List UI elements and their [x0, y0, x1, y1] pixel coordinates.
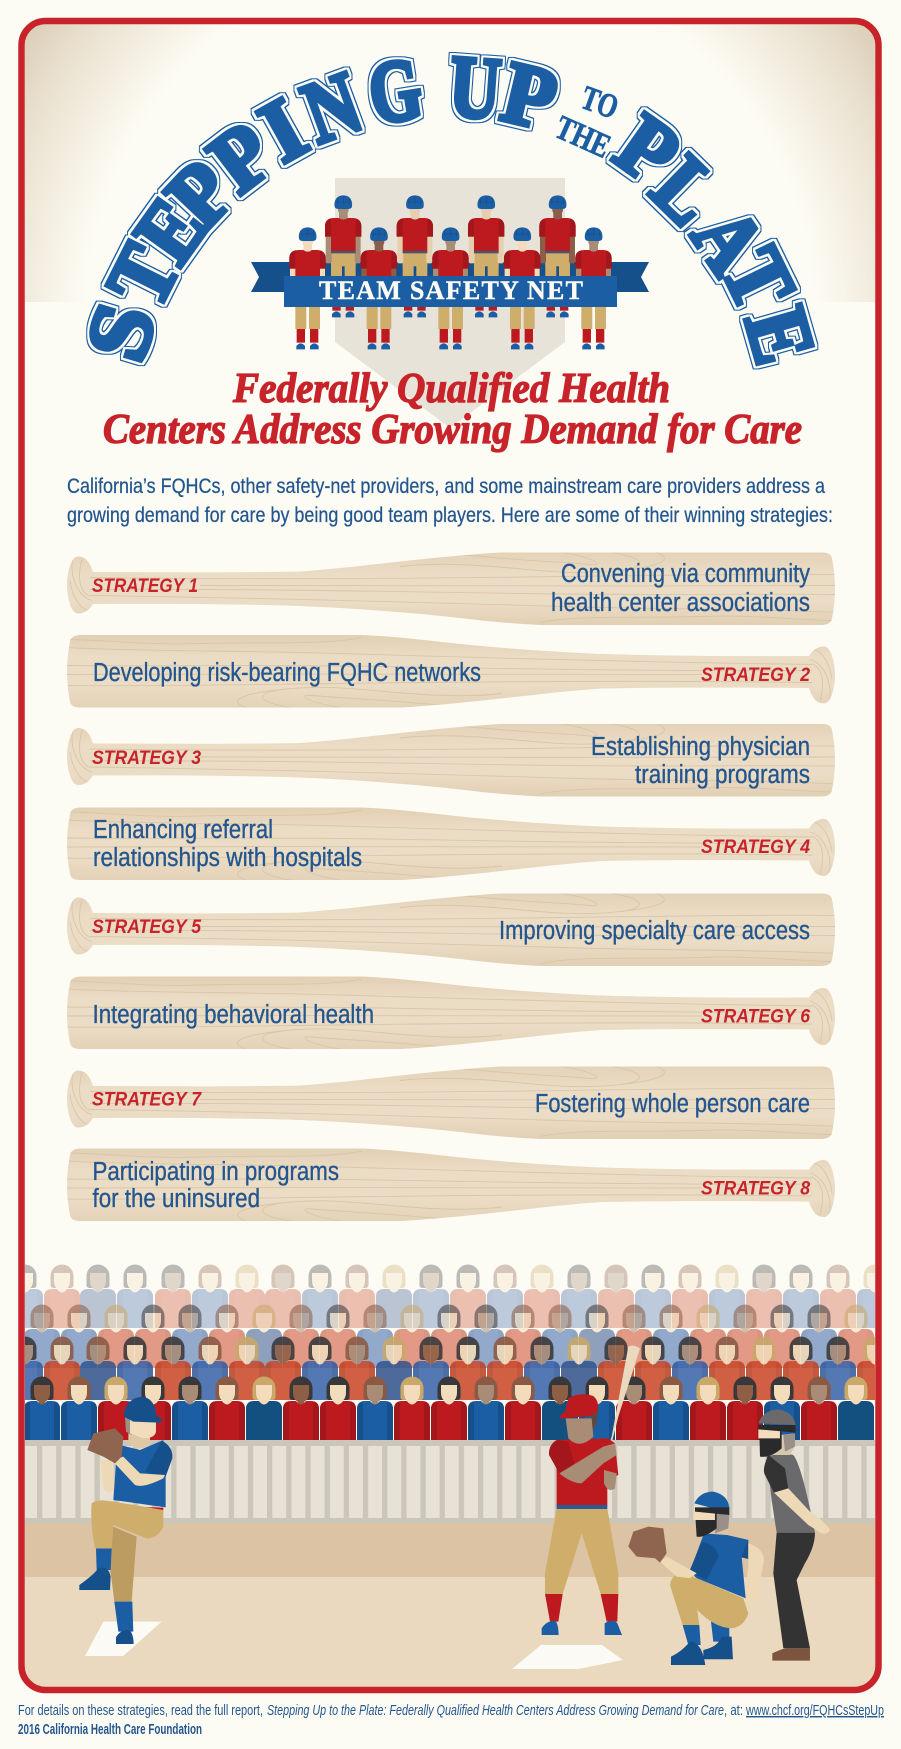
panel: strategy 4 bat: Enhancing referral: [93, 816, 273, 844]
panel: strategy 1 bat: [67, 550, 836, 625]
panel: strategy 6 bat: STRATEGY 6: [701, 1006, 810, 1028]
panel: strategy 3 bat: Establishing physician: [591, 733, 810, 761]
crowd row 4: [7, 1264, 893, 1328]
title arc letters: E: [726, 297, 834, 374]
front row players: [289, 227, 612, 349]
panel: strategy 5 bat: STRATEGY 5: [92, 917, 201, 938]
panel: strategy 8 bat: [66, 1148, 835, 1223]
panel: strategy 3 bat: STRATEGY 3: [92, 748, 201, 769]
crowd row 2: [7, 1336, 893, 1400]
panel: strategy 3 bat: training programs: [635, 761, 810, 789]
panel: strategy 2 bat: Developing risk-bearing FQHC networks: [93, 659, 481, 687]
crowd row 3: [24, 1304, 874, 1368]
panel: strategy 8 bat: Participating in programs: [92, 1158, 339, 1186]
panel: strategy 2 bat: STRATEGY 2: [701, 665, 810, 686]
panel: strategy 4 bat: relationships with hospitals: [93, 844, 362, 872]
intro paragraph: [67, 475, 833, 527]
panel: strategy 4 bat: [66, 808, 835, 882]
title small words: to the: TO: [576, 78, 624, 127]
crowd front row: [24, 1376, 874, 1440]
catcher: [628, 1492, 764, 1665]
title small words: to the: THE: [550, 108, 616, 166]
footer source line: For details on these strategies, read the full report,: [18, 1703, 263, 1719]
panel: strategy 3 bat: [67, 722, 836, 796]
title: Stepping Up to the Plate: [66, 38, 834, 374]
infield dirt: [25, 1523, 875, 1693]
title arc letters: T: [702, 234, 813, 324]
panel: strategy 1 bat: STRATEGY 1: [92, 576, 198, 597]
umpire: [758, 1409, 830, 1661]
outfield fence: [25, 1440, 875, 1523]
panel: strategy 5 bat: [67, 892, 836, 966]
home plate backdrop: [335, 178, 565, 428]
banner tails: [251, 262, 649, 292]
title arc letters: L: [634, 137, 739, 243]
panel: strategy 6 bat: Integrating behavioral health: [92, 1001, 374, 1029]
panel: top shaded sky: [25, 24, 875, 302]
home plate: [512, 1645, 623, 1669]
title arc letters: U: [446, 38, 504, 139]
panel: strategy 2 bat: [66, 635, 835, 710]
panel: strategy 7 bat: [67, 1064, 836, 1139]
back row players: [325, 195, 576, 317]
title arc letters: G: [362, 39, 428, 143]
panel: strategy 8 bat: for the uninsured: [92, 1185, 260, 1213]
footer copyright: 2016 California Health Care Foundation: [18, 1722, 202, 1738]
title arc letters: P: [148, 142, 254, 246]
banner: team safety net: TEAM SAFETY NET: [319, 276, 583, 305]
pitching rubber: [85, 1622, 162, 1656]
panel: strategy 7 bat: STRATEGY 7: [92, 1090, 202, 1110]
title arc letters: [66, 38, 834, 374]
footer source line: Stepping Up to the Plate: Federally Qualified Health Centers Address Growing Demand for Care: [267, 1703, 724, 1719]
panel: strategy 5 bat: Improving specialty care access: [499, 917, 810, 945]
pitcher: [79, 1397, 172, 1656]
title arc letters: P: [192, 103, 291, 212]
panel: strategy 6 bat: [66, 976, 835, 1051]
title arc letters: A: [674, 190, 785, 290]
batter: [542, 1346, 640, 1635]
panel: strategy 7 bat: Fostering whole person care: [535, 1090, 810, 1118]
panel: strategy 1 bat: health center associations: [551, 589, 810, 617]
subtitle: Centers Address Growing Demand for Care: [103, 407, 802, 453]
panel: strategy 1 bat: Convening via community: [561, 560, 810, 588]
team of players with banner: [251, 195, 649, 349]
title arc letters: I: [245, 80, 322, 181]
footer source line: , at:: [724, 1703, 743, 1719]
title arc letters: S: [66, 292, 175, 371]
title arc letters: T: [88, 230, 199, 321]
title arc letters: E: [115, 181, 225, 280]
title small words: to the: [550, 78, 624, 166]
title arc letters: P: [493, 43, 566, 149]
subtitle: [103, 366, 802, 453]
title arc letters: N: [291, 53, 373, 163]
subtitle: Federally Qualified Health: [232, 366, 670, 412]
crowd in the stands: [7, 1264, 893, 1440]
title arc letters: P: [599, 95, 697, 204]
panel: strategy 4 bat: STRATEGY 4: [701, 837, 810, 858]
panel: strategy 8 bat: STRATEGY 8: [701, 1178, 810, 1200]
